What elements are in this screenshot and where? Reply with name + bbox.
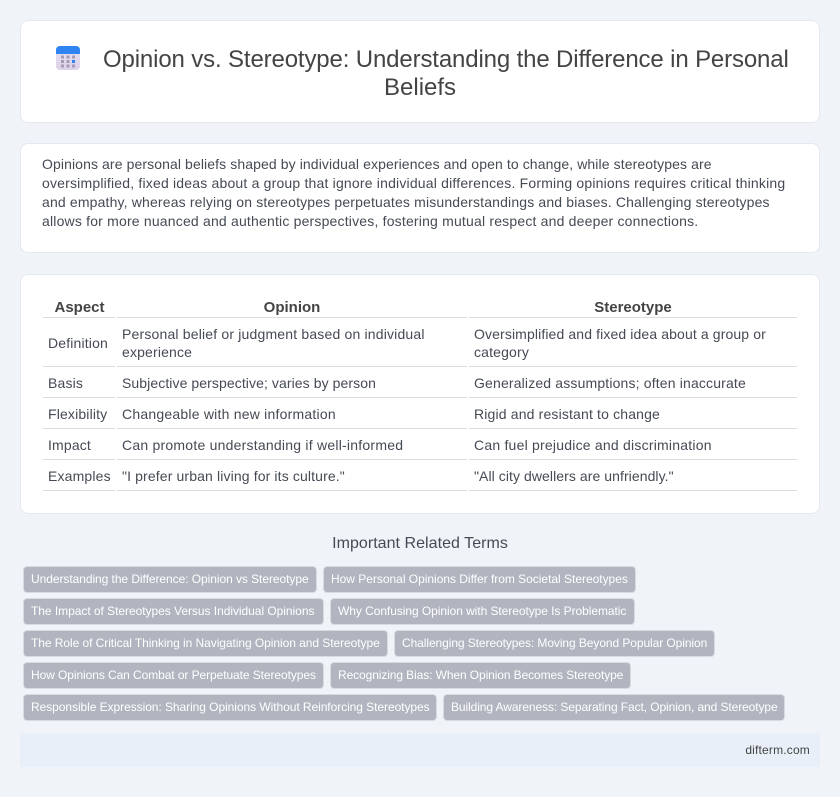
- tag: [331, 663, 630, 688]
- intro paragraph: [42, 156, 785, 229]
- row: definition: category: [474, 344, 529, 360]
- table header: Stereotype: [594, 299, 672, 316]
- panel: comparison table: [20, 274, 820, 514]
- tag: Responsible Expression: Sharing Opinions Without Reinforcing Stereotypes: [31, 700, 430, 714]
- tag: [395, 631, 714, 656]
- row: definition: [48, 326, 766, 360]
- intro paragraph: and empathy, whereas relying on stereotypes perpetuates misunderstandings and biases. Challenging stereotypes: [42, 194, 770, 210]
- row: impact: Impact: [48, 437, 91, 453]
- row: impact: [48, 437, 712, 453]
- tag: [331, 599, 634, 624]
- intro paragraph: allows for more nuanced and authentic perspectives, fostering mutual respect and deeper connections.: [42, 213, 698, 229]
- tag: How Opinions Can Combat or Perpetuate Stereotypes: [31, 668, 316, 682]
- row: definition: experience: [122, 344, 192, 360]
- intro paragraph: oversimplified, fixed ideas about a group that ignore individual differences. Forming opinions requires critical thinking: [42, 175, 785, 191]
- title: Beliefs: [384, 74, 456, 101]
- tag: [24, 631, 387, 656]
- row: basis: Generalized assumptions; often inaccurate: [474, 375, 746, 391]
- row: basis: Subjective perspective; varies by person: [122, 375, 376, 391]
- comparison table: [43, 299, 797, 491]
- panel: header: [20, 20, 820, 123]
- tag: [24, 695, 436, 720]
- tag: [24, 599, 323, 624]
- tag: Challenging Stereotypes: Moving Beyond Popular Opinion: [402, 636, 707, 650]
- row: definition: Personal belief or judgment based on individual: [122, 326, 425, 342]
- title: Opinion vs. Stereotype: Understanding the Difference in Personal: [103, 46, 789, 73]
- tag: Why Confusing Opinion with Stereotype Is Problematic: [338, 604, 626, 618]
- row: examples: Examples: [48, 468, 111, 484]
- row: impact: Can promote understanding if well-informed: [122, 437, 403, 453]
- tag: [444, 695, 784, 720]
- tag: Recognizing Bias: When Opinion Becomes Stereotype: [338, 668, 623, 682]
- tag: How Personal Opinions Differ from Societal Stereotypes: [331, 572, 628, 586]
- tag: [324, 567, 635, 592]
- table header: Opinion: [264, 299, 320, 316]
- row: basis: [48, 375, 746, 391]
- panel: intro text: [20, 143, 820, 253]
- row: definition: Oversimplified and fixed idea about a group or: [474, 326, 766, 342]
- footer source: difterm.com: [745, 743, 810, 757]
- related term tags: [23, 566, 785, 721]
- heading: important related terms: Important Related Terms: [332, 535, 508, 552]
- row: examples: "I prefer urban living for its culture.": [122, 468, 345, 484]
- intro paragraph: Opinions are personal beliefs shaped by individual experiences and open to change, while stereotypes are: [42, 156, 712, 172]
- tag: The Role of Critical Thinking in Navigating Opinion and Stereotype: [31, 636, 380, 650]
- row: examples: [48, 468, 674, 484]
- row: flexibility: Changeable with new information: [122, 406, 336, 422]
- icon: calendar: [56, 46, 80, 70]
- row: definition: Definition: [48, 335, 108, 351]
- tag: [24, 567, 316, 592]
- row: impact: Can fuel prejudice and discrimination: [474, 437, 712, 453]
- tag: Understanding the Difference: Opinion vs Stereotype: [31, 572, 309, 586]
- tag: [24, 663, 323, 688]
- table header: Aspect: [54, 299, 105, 316]
- tag: The Impact of Stereotypes Versus Individual Opinions: [31, 604, 314, 618]
- row: flexibility: Flexibility: [48, 406, 107, 422]
- row: basis: Basis: [48, 375, 83, 391]
- tag: Building Awareness: Separating Fact, Opinion, and Stereotype: [451, 700, 778, 714]
- row: flexibility: Rigid and resistant to change: [474, 406, 660, 422]
- row: examples: "All city dwellers are unfriendly.": [474, 468, 674, 484]
- table header: [54, 299, 672, 316]
- footer bar: [20, 733, 820, 767]
- title: [103, 46, 789, 101]
- row: flexibility: [48, 406, 660, 422]
